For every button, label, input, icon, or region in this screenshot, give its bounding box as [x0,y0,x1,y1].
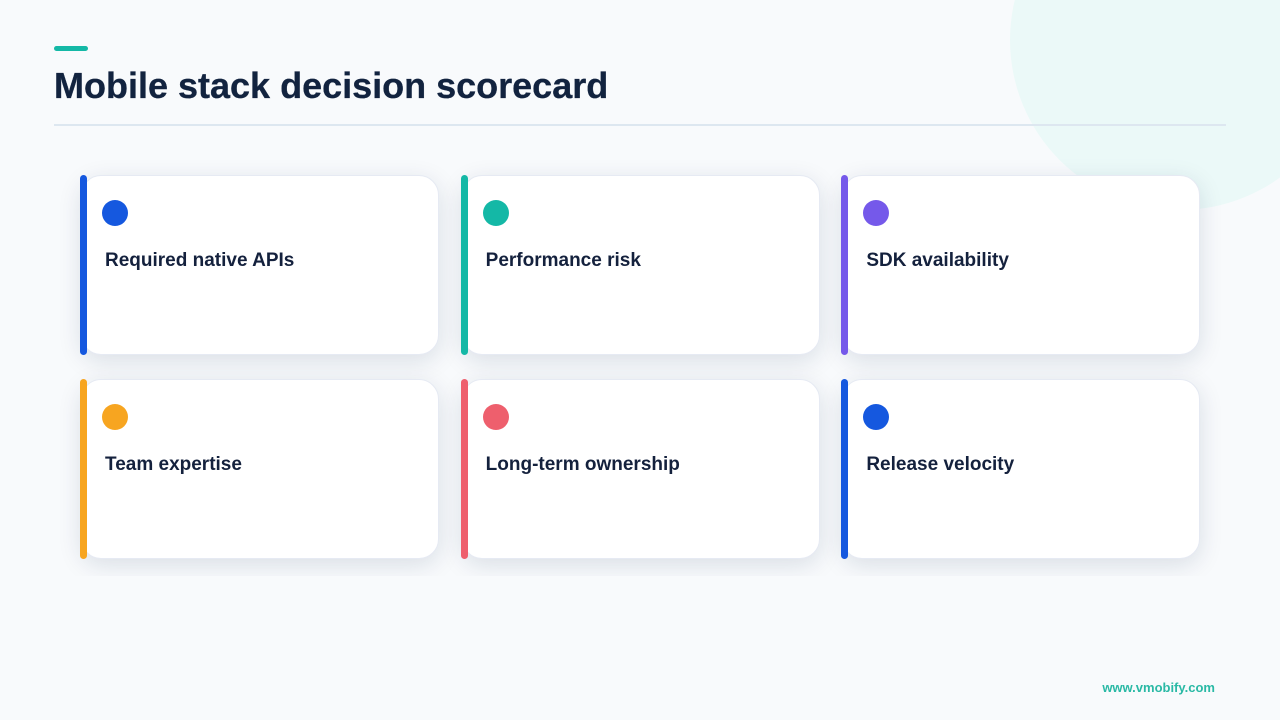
label: Team expertise: Team expertise [105,454,242,475]
label: Required native APIs: Required native APIs [105,250,294,271]
icon: blue dot [863,404,889,430]
panel: Performance risk [454,174,828,368]
panel: Release velocity [834,378,1208,572]
panel: Required native APIs [74,174,446,368]
decorative corner circle [1010,0,1280,210]
icon: teal dot [483,200,509,226]
title: Mobile stack decision scorecard [54,65,608,106]
title accent bar [54,46,88,51]
icon: coral dot [483,404,509,430]
label: Release velocity: Release velocity [866,454,1014,475]
icon: blue dot [102,200,128,226]
panel: Long-term ownership [454,378,828,572]
icon: violet dot [863,200,889,226]
label: Performance risk: Performance risk [486,250,641,271]
panel: Team expertise [74,378,446,572]
scorecard grid [74,174,1208,572]
label: Long-term ownership: Long-term ownership [486,454,680,475]
footer URL: www.vmobify.com [1102,680,1215,695]
icon: amber dot [102,404,128,430]
label: SDK availability: SDK availability [866,250,1009,271]
panel: SDK availability [834,174,1208,368]
